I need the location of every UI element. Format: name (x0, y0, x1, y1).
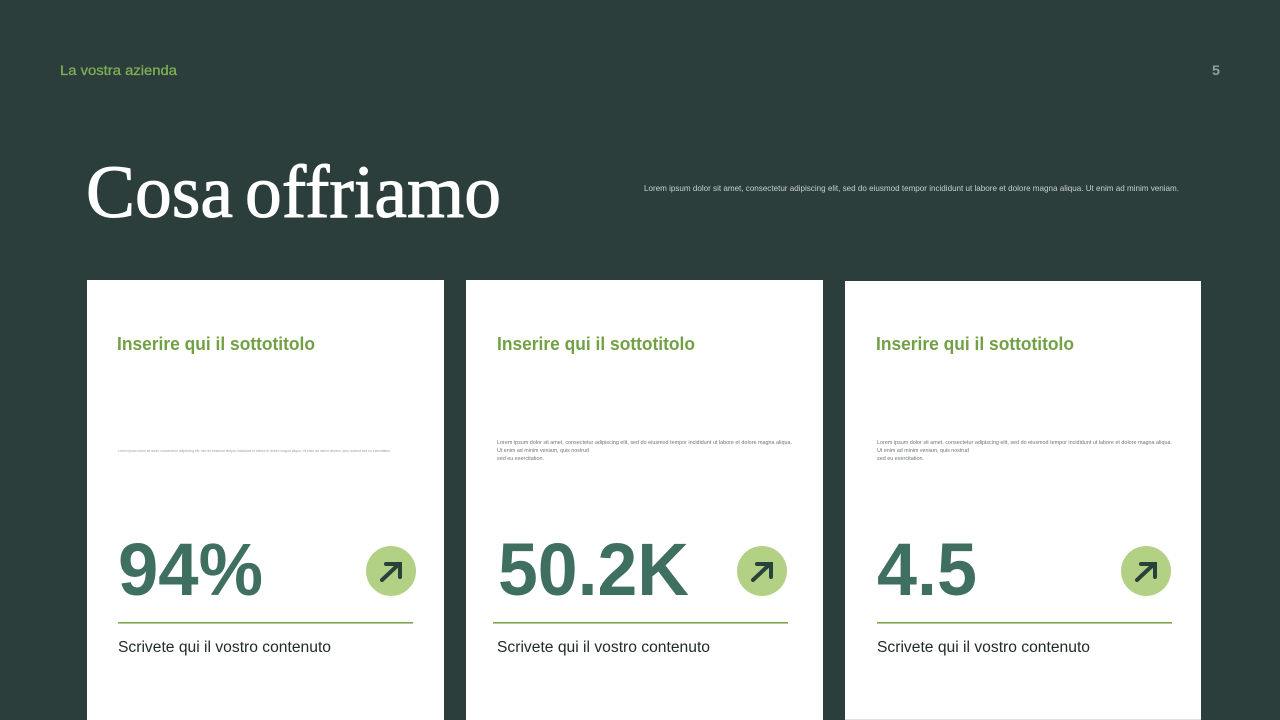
card 1 statistic: 94% (118, 528, 263, 611)
card 3 body text: Ut enim ad minim veniam, quis nostrud (877, 448, 969, 454)
page number: 5 (1212, 62, 1220, 78)
title: Cosa (86, 151, 233, 234)
card 1 caption: Scrivete qui il vostro contenuto (118, 639, 331, 656)
card 3 subtitle: Inserire qui il sottotitolo (876, 334, 1074, 354)
title: offriamo (245, 151, 501, 234)
icon: card 3 arrow (1121, 546, 1171, 596)
panel: card 2 (466, 280, 823, 720)
card 3 body text (877, 440, 1172, 462)
card 3 body text: sed eu exercitation. (877, 456, 924, 462)
card 2 body text: sed eu exercitation. (497, 456, 544, 462)
card 2 subtitle: Inserire qui il sottotitolo (497, 334, 695, 354)
section label: La vostra azienda (60, 62, 177, 78)
card 2 caption: Scrivete qui il vostro contenuto (497, 639, 710, 656)
card 3 statistic: 4.5 (877, 528, 977, 611)
card 3 body text: Lorem ipsum dolor sit amet, consectetur adipiscing elit, sed do eiusmod tempor incididunt ut labore et dolore magna aliqua. (877, 440, 1172, 446)
card 2 statistic: 50.2K (498, 528, 689, 611)
title (86, 151, 501, 234)
card 3 caption: Scrivete qui il vostro contenuto (877, 639, 1090, 656)
panel: card 3 (845, 281, 1201, 720)
icon: card 1 arrow (366, 546, 416, 596)
card 2 body text: Lorem ipsum dolor sit amet, consectetur adipiscing elit, sed do eiusmod tempor incididunt ut labore et dolore magna aliqua. (497, 440, 792, 446)
intro text: Lorem ipsum dolor sit amet, consectetur adipiscing elit, sed do eiusmod tempor incididunt ut labore et dolore magna aliqua. Ut enim ad minim veniam. (644, 183, 1179, 193)
card 1 body text: Lorem ipsum dolor sit amet, consectetur adipiscing elit, sed do eiusmod tempor incididunt ut labore et dolore magna aliqua. Ut enim ad minim veniam, quis nostrud sed eu exercitation. (118, 448, 391, 453)
card 1 subtitle: Inserire qui il sottotitolo (117, 334, 315, 354)
panel: card 1 (87, 280, 444, 720)
card 2 body text (497, 440, 792, 462)
card 2 body text: Ut enim ad minim veniam, quis nostrud (497, 448, 589, 454)
icon: card 2 arrow (737, 546, 787, 596)
